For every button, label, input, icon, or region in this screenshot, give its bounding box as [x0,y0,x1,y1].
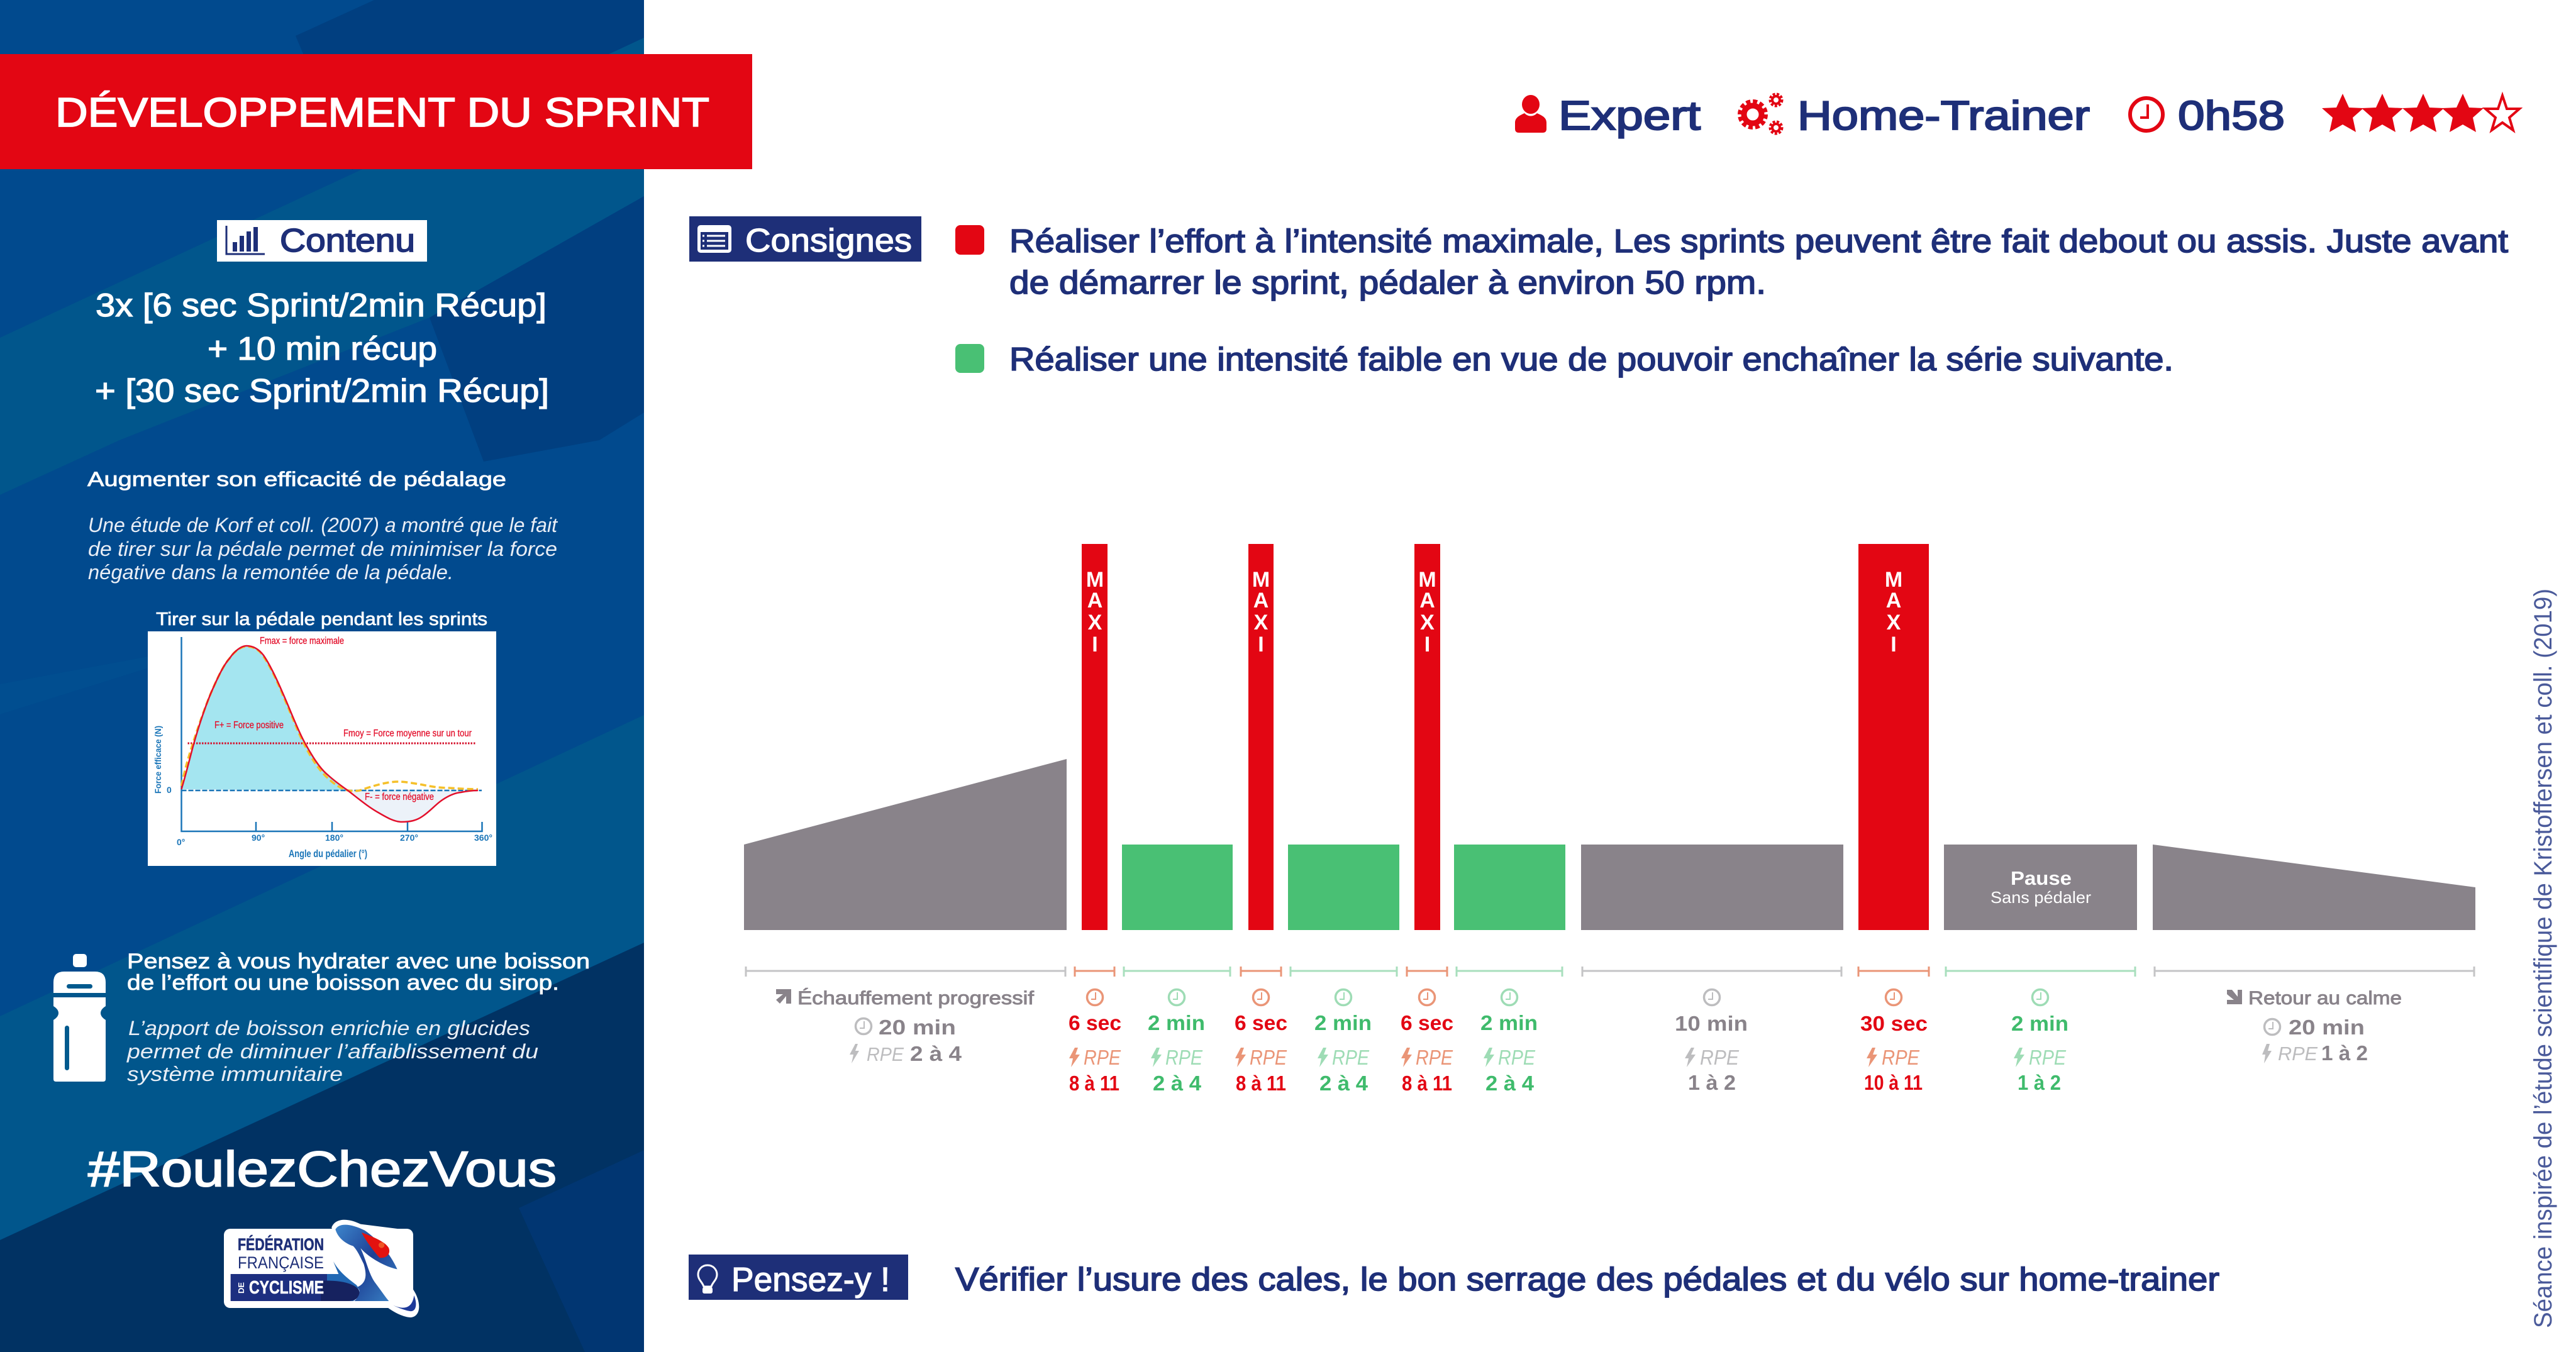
label: recovery 3 [1480,990,1538,1095]
hashtag: #RoulezChezVous [88,1141,557,1197]
label: recovery 1: 2 min [1148,1011,1205,1034]
session content text: 3x [6 sec Sprint/2min Récup] [96,287,547,324]
label: recovery 2: RPE [1332,1046,1370,1069]
sprint 3 [1414,544,1440,930]
label: cool-down: RPE [2278,1043,2318,1065]
text block: hydration: permet de diminuer l’affaiblissement du [126,1040,538,1063]
label: long sprint: RPE [1882,1046,1920,1069]
text block: hydration: L’apport de boisson enrichie en glucides [128,1017,530,1039]
sprint 3: A [1419,589,1435,612]
label: pause recovery: 2 min [2011,1012,2068,1035]
chart: pedal force: 360° [474,833,492,843]
sprint 1: I [1092,633,1098,657]
instruction: red effort: de démarrer le sprint, pédaler à environ 50 rpm. [1009,265,1766,301]
label: sprint 3: 6 sec [1401,1011,1453,1034]
sprint 2: I [1258,633,1264,657]
label: sprint 2: 6 sec [1235,1011,1287,1034]
label: pause recovery: 1 à 2 [2018,1071,2061,1094]
sprint 2: X [1254,611,1269,634]
logo: FFC: FRANÇAISE [238,1253,324,1272]
heading: consignes: Consignes [745,223,912,259]
long sprint [1858,544,1929,930]
instruction: red effort [955,223,2509,301]
warm-up ramp [744,759,1067,930]
instruction: green recovery: Réaliser une intensité faible en vue de pouvoir enchaîner la série suivante. [1009,341,2174,378]
long sprint: A [1886,589,1901,612]
chart: pedal force: 90° [252,833,265,843]
chart title: Tirer sur la pédale pendant les sprints [156,609,487,629]
heading: contenu [217,220,427,262]
chart: pedal force: Force efficace (N) [153,726,163,794]
session content text: + [30 sec Sprint/2min Récup] [95,373,549,409]
sprint 1 [1082,544,1108,930]
text block: pedalling efficiency: négative dans la remontée de la pédale. [88,561,453,584]
label: warm-up: Échauffement progressif [797,988,1035,1009]
sprint 2: M [1252,568,1270,592]
header: level, equipment, duration, rating [1515,92,2519,138]
label: long recovery: 1 à 2 [1688,1071,1736,1094]
label: cool-down: Retour au calme [2248,988,2402,1009]
sprint 2: A [1253,589,1269,612]
label: sprint 3: RPE [1416,1046,1453,1069]
cool-down ramp [2153,845,2475,930]
label: cool-down [2227,988,2402,1065]
heading: contenu: Contenu [280,223,415,259]
duration brackets [746,967,2474,977]
label: recovery 1: RPE [1165,1046,1203,1069]
heading: pensez-y: Pensez-y ! [731,1261,890,1299]
label: pause recovery [2011,990,2068,1094]
chart: pedal force: 180° [325,833,343,843]
sprint 3: I [1424,633,1430,657]
rating stars [2322,94,2519,132]
title banner: DÉVELOPPEMENT DU SPRINT [55,89,709,135]
label: long recovery [1675,990,1748,1094]
text block: hydration: de l’effort ou une boisson avec du sirop. [127,971,559,995]
label: warm-up: RPE [867,1043,904,1065]
chart: pedal force: 0 [167,785,172,795]
label: pause recovery: RPE [2029,1046,2067,1069]
chart: pedal force: Fmax = force maximale [260,636,344,646]
label: recovery 2: 2 à 4 [1319,1072,1368,1095]
session content text [95,287,549,409]
chart: workout intervals [744,544,2475,930]
label: cool-down: 20 min [2289,1016,2365,1039]
icon: water bottle [53,954,106,1082]
icon: clock [2130,98,2163,131]
recovery 2 [1288,845,1399,930]
instruction: red effort: Réaliser l’effort à l’intensité maximale, Les sprints peuvent être fait debout ou assis. Juste avant [1009,223,2509,260]
chart: pedal force: Fmoy = Force moyenne sur un tour [343,728,472,739]
label: recovery 3: 2 min [1480,1011,1538,1034]
label: recovery 2 [1314,990,1372,1095]
chart: pedal force: 0° [177,837,185,847]
icon: gears [1740,94,1782,133]
label: sprint 1: RPE [1084,1046,1121,1069]
pause block: Sans pédaler [1990,888,2091,907]
logo: FFC: FÉDÉRATION [238,1234,324,1254]
heading: consignes [689,216,921,262]
text block: hydration: Pensez à vous hydrater avec une boisson [127,950,590,973]
label: long sprint: 10 à 11 [1864,1071,1923,1094]
pause block: Pause [2011,867,2072,889]
label: warm-up: 20 min [879,1016,956,1039]
session content text: + 10 min récup [208,331,437,367]
label: recovery 1: 2 à 4 [1153,1072,1202,1095]
long sprint: I [1890,633,1897,657]
logo: FFC: CYCLISME [249,1278,324,1298]
label: duration: 0h58 [2178,92,2285,138]
chart: pedal force: 270° [400,833,418,843]
text block: pedalling efficiency [87,468,558,584]
sprint 2 [1248,544,1274,930]
side credit: Séance inspirée de l’étude scientifique de Kristoffersen et coll. (2019) [2529,589,2557,1328]
label: expert: Expert [1558,92,1701,138]
label: sprint 2 [1235,990,1287,1095]
sprint 1: X [1088,611,1102,634]
icon: person [1515,95,1546,133]
chart: pedal force: Angle du pédalier (°) [289,848,367,860]
logo: FFC [224,1220,419,1317]
pause block [1944,845,2137,930]
chart: pedal force [148,609,496,866]
label: long sprint [1860,990,1928,1094]
text block: hydration: système immunitaire [127,1063,343,1085]
label: recovery 2: 2 min [1314,1011,1372,1034]
label: long recovery: 10 min [1675,1012,1748,1035]
title banner [0,54,752,169]
text block: pedalling efficiency: Augmenter son efficacité de pédalage [87,468,506,490]
label: cool-down: 1 à 2 [2321,1041,2368,1065]
sprint 1: M [1086,568,1104,592]
label: home-trainer: Home-Trainer [1797,92,2090,138]
text block: pedalling efficiency: de tirer sur la pédale permet de minimiser la force [88,538,557,560]
chart: pedal force: F+ = Force positive [214,720,284,731]
recovery 1 [1122,845,1233,930]
label: sprint 2: RPE [1250,1046,1287,1069]
sprint 1: A [1087,589,1102,612]
recovery 3 [1454,845,1565,930]
text block: pedalling efficiency: Une étude de Korf et coll. (2007) a montré que le fait [88,514,558,536]
label: sprint 3: 8 à 11 [1402,1072,1452,1095]
long recovery [1581,845,1843,930]
label: sprint 1: 8 à 11 [1069,1072,1119,1095]
label: warm-up [776,988,1035,1065]
long sprint: M [1885,568,1902,592]
heading: pensez-y [689,1255,908,1300]
label: warm-up: 2 à 4 [910,1042,962,1065]
sidebar background [0,0,644,1352]
label: sprint 2: 8 à 11 [1236,1072,1286,1095]
sprint 3: X [1420,611,1435,634]
label: sprint 3 [1401,990,1453,1095]
label: long recovery: RPE [1700,1046,1740,1069]
label: sprint 1 [1069,990,1121,1095]
logo: FFC: DE [236,1282,246,1294]
tip text: Vérifier l’usure des cales, le bon serrage des pédales et du vélo sur home-trainer [955,1261,2219,1298]
label: long sprint: 30 sec [1860,1012,1928,1035]
sprint 3: M [1418,568,1436,592]
long sprint: X [1887,611,1901,634]
chart: pedal force: F- = force négative [365,792,434,802]
text block: hydration [126,950,590,1085]
label: recovery 3: RPE [1498,1046,1536,1069]
label: recovery 3: 2 à 4 [1485,1072,1535,1095]
label: sprint 1: 6 sec [1069,1011,1121,1034]
label: recovery 1 [1148,990,1205,1095]
panel: sidebar [0,0,752,1352]
